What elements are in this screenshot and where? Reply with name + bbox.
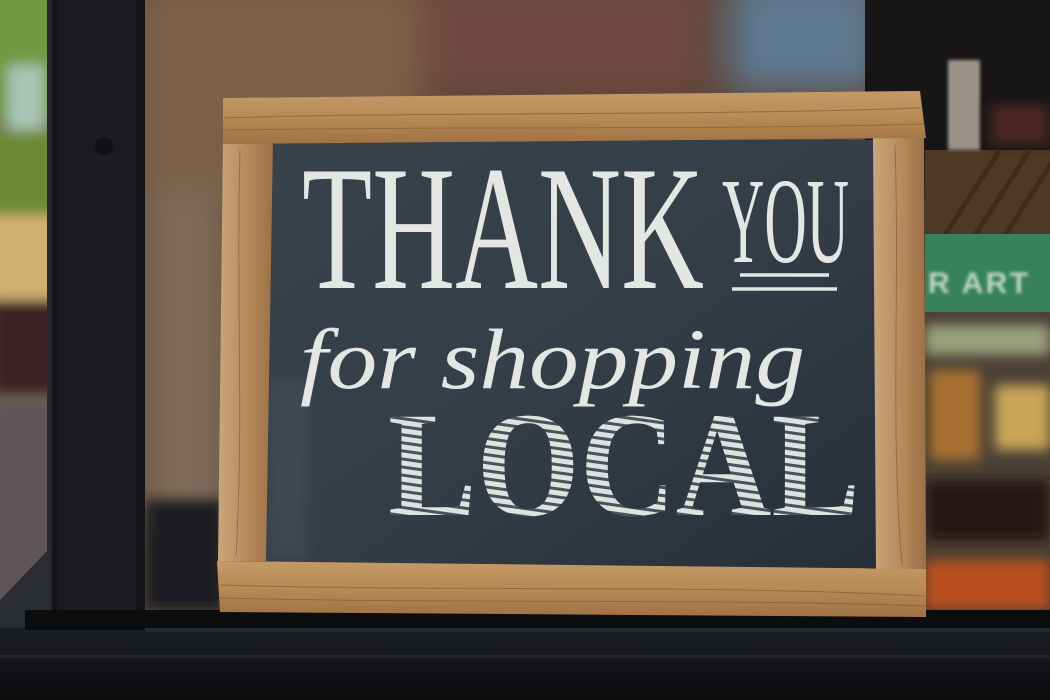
green shop banner — [925, 234, 1050, 312]
lettering: THANK: THANK — [302, 129, 704, 327]
frame: bottom rail — [217, 561, 926, 617]
sign — [217, 91, 926, 617]
frame: top rail — [223, 91, 926, 144]
underline strokes below YOU — [732, 275, 837, 289]
lettering: for shopping: for shopping — [300, 311, 805, 407]
sign: YOU — [722, 154, 849, 289]
background: blurred street reflections through the window — [130, 0, 880, 610]
lettering: LOCAL: LOCAL — [388, 382, 860, 548]
window sill — [0, 548, 1050, 700]
background: shop shelves and merchandise at right — [865, 0, 1050, 615]
frame: left rail — [218, 140, 273, 561]
background: street seen left of the post — [0, 0, 47, 600]
green shop banner: R ART — [928, 267, 1028, 300]
frame: right rail — [873, 138, 926, 570]
glass reflection on sign — [268, 380, 308, 560]
window post — [47, 0, 145, 612]
chalkboard panel — [266, 140, 876, 568]
